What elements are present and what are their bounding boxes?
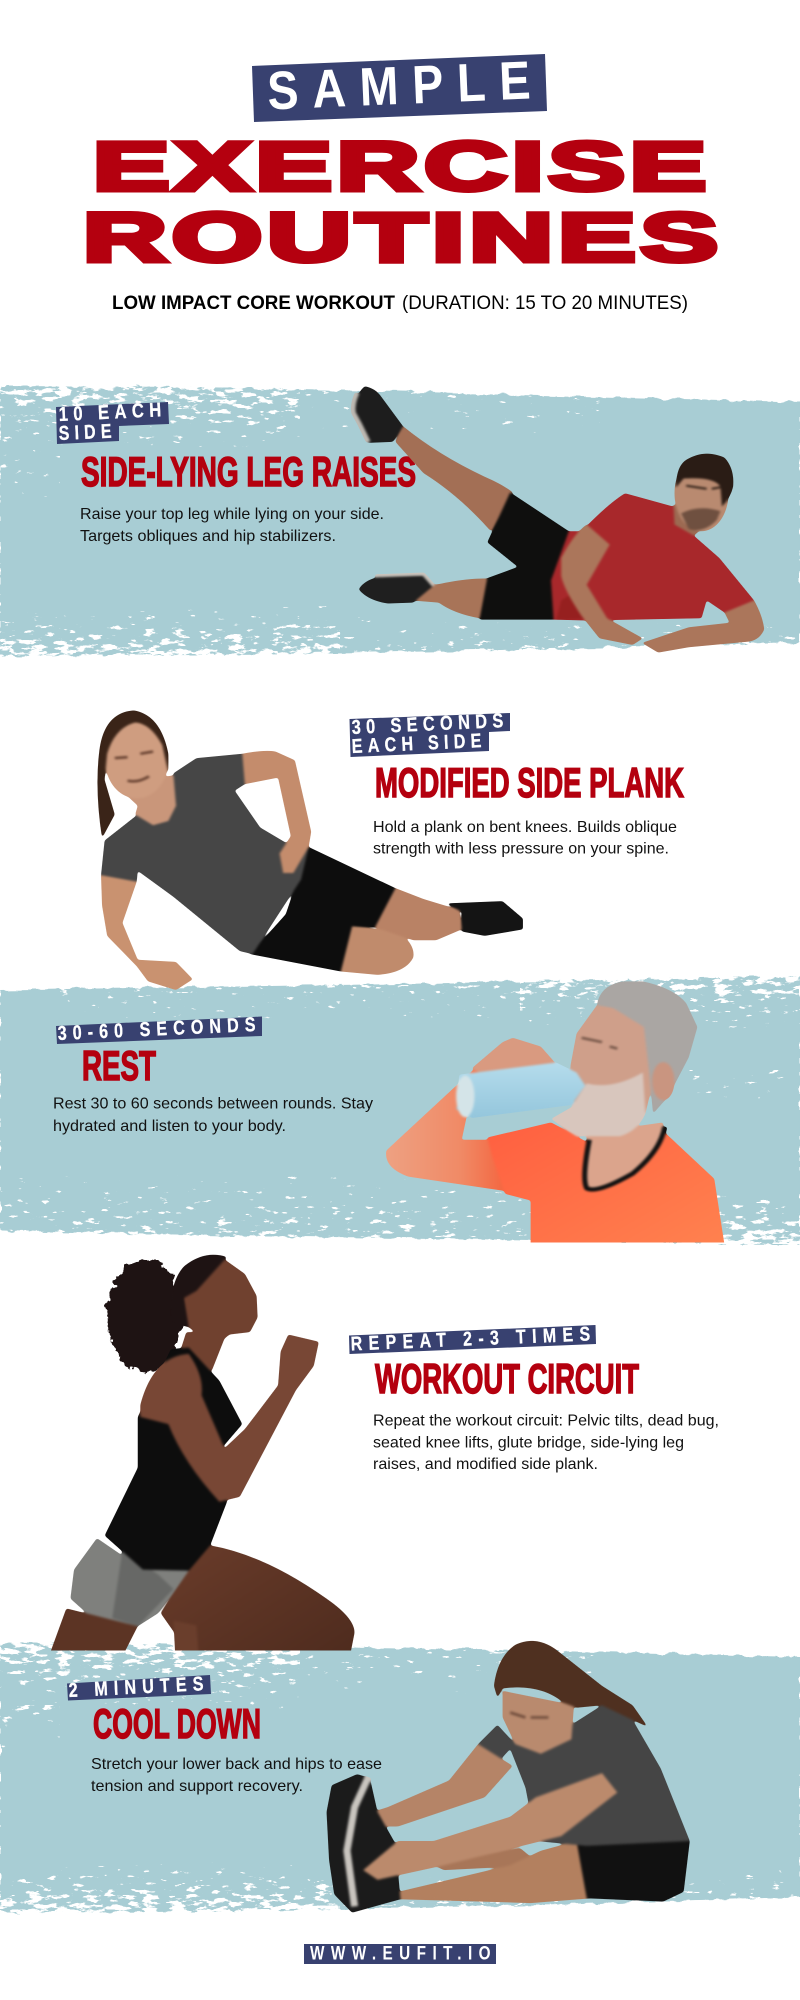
- panel: cool down: [0, 1640, 800, 1914]
- subtitle: LOW IMPACT CORE WORKOUT: [112, 292, 395, 314]
- teal brush band: [0, 1640, 800, 1914]
- description: Hold a plank on bent knees. Builds oblique: [373, 819, 677, 836]
- figure: man lying with raised leg: [353, 386, 764, 653]
- tag: 30 seconds each side: 30 SECONDS: [351, 710, 509, 739]
- tag: 30 seconds each side: [350, 710, 510, 758]
- description: hydrated and listen to your body.: [53, 1118, 286, 1135]
- teal brush band: [0, 380, 800, 660]
- figure: man drinking from bottle: [386, 981, 727, 1261]
- heading: COOL DOWN: [93, 1700, 261, 1747]
- panel: workout circuit: [43, 1255, 719, 1671]
- heading: REST: [82, 1042, 156, 1089]
- panel: side-lying leg raises: [0, 380, 800, 660]
- description: [80, 506, 384, 545]
- description: strength with less pressure on your spine.: [373, 840, 669, 858]
- panel: modified side plank: [97, 710, 684, 990]
- tag: 30 seconds each side: EACH SIDE: [351, 730, 487, 758]
- subtitle: [112, 292, 688, 314]
- description: raises, and modified side plank.: [373, 1456, 598, 1473]
- description: [53, 1096, 373, 1135]
- description: [373, 819, 677, 858]
- description: tension and support recovery.: [91, 1778, 303, 1795]
- panel: rest: [0, 970, 800, 1261]
- description: Rest 30 to 60 seconds between rounds. Stay: [53, 1096, 373, 1112]
- heading: WORKOUT CIRCUIT: [375, 1355, 639, 1402]
- tag: sample: SAMPLE: [266, 50, 545, 122]
- tag: 10 each side: 10 EACH: [58, 399, 167, 426]
- tag: 2 minutes: 2 MINUTES: [68, 1673, 210, 1702]
- description: [91, 1756, 382, 1795]
- tag: 10 each side: [56, 399, 169, 445]
- description: Repeat the workout circuit: Pelvic tilts, dead bug,: [373, 1412, 719, 1430]
- subtitle: (DURATION: 15 TO 20 MINUTES): [402, 292, 688, 314]
- header: [83, 50, 723, 314]
- title: [83, 128, 723, 276]
- description: [373, 1412, 719, 1473]
- heading: SIDE-LYING LEG RAISES: [81, 448, 416, 495]
- curly ponytail: [107, 1259, 184, 1371]
- description: seated knee lifts, glute bridge, side-lying leg: [373, 1434, 684, 1452]
- figure: woman running: [43, 1255, 355, 1671]
- tag: repeat 2-3 times: REPEAT 2-3 TIMES: [350, 1323, 597, 1355]
- figure: woman in side plank: [97, 710, 523, 990]
- title: EXERCISE: [93, 128, 711, 205]
- title: ROUTINES: [83, 199, 723, 276]
- description: Stretch your lower back and hips to ease: [91, 1756, 382, 1773]
- description: Raise your top leg while lying on your side.: [80, 506, 384, 523]
- teal brush band: [0, 970, 800, 1245]
- figure: woman stretching to toes: [327, 1641, 690, 1913]
- tag: 10 each side: SIDE: [58, 420, 117, 445]
- tag: 30-60 seconds: 30-60 SECONDS: [57, 1014, 262, 1045]
- footer: website: WWW.EUFIT.IO: [310, 1944, 497, 1964]
- description: Targets obliques and hip stabilizers.: [80, 528, 336, 545]
